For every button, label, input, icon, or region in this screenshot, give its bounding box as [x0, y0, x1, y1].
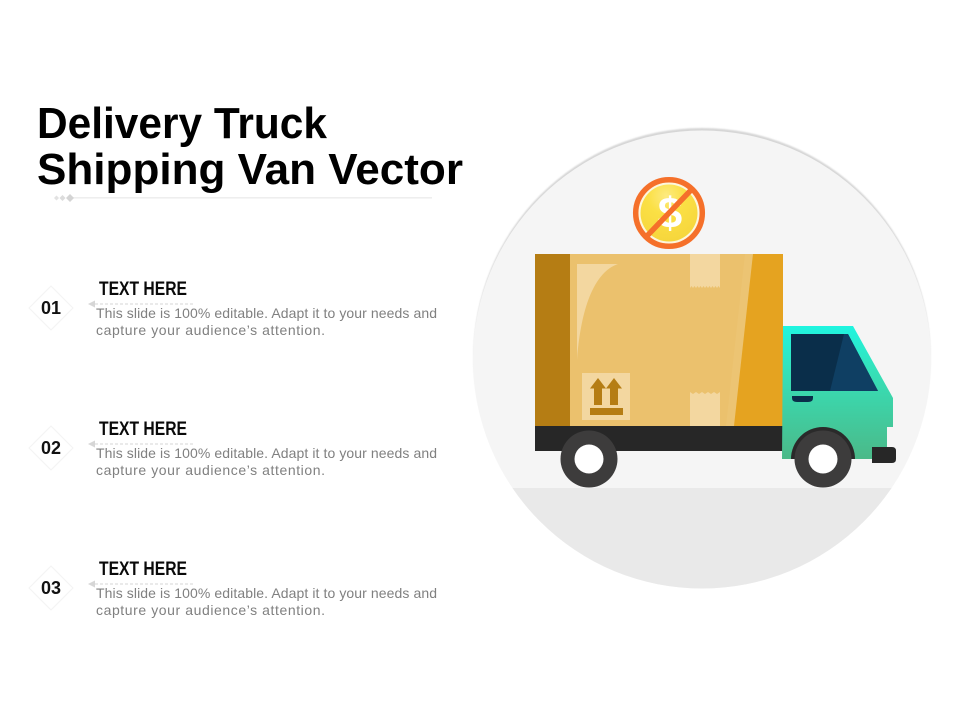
number badge 03	[29, 566, 73, 610]
arrow 02	[88, 440, 194, 448]
item text 03: This slide is 100% editable. Adapt it to your needs and	[96, 585, 437, 601]
number badge 03: 03	[41, 578, 61, 598]
item 03	[29, 559, 437, 618]
title: Delivery Truck	[37, 99, 327, 148]
box highlight	[577, 264, 618, 360]
item text 02: capture your audience’s attention.	[96, 462, 325, 478]
arrow 03	[88, 580, 194, 588]
number badge 01: 01	[41, 298, 61, 318]
icon: no money sign	[636, 180, 702, 246]
cargo box	[535, 254, 783, 426]
packing tape bottom	[690, 392, 720, 426]
front wheel	[791, 427, 855, 488]
item heading 03: TEXT HERE	[99, 559, 187, 580]
door handle	[792, 396, 813, 402]
item 02	[29, 419, 437, 478]
truck	[535, 254, 896, 488]
title: Shipping Van Vector	[37, 145, 463, 194]
bumper	[872, 447, 896, 463]
ground	[512, 488, 892, 588]
rear wheel	[560, 430, 618, 488]
packing tape top	[690, 254, 720, 288]
scene circle background	[473, 128, 931, 588]
number badge 01	[29, 286, 73, 330]
number badge 02	[29, 426, 73, 470]
this way up label	[582, 373, 630, 420]
item text 03: capture your audience’s attention.	[96, 602, 325, 618]
arrow 01	[88, 300, 194, 308]
number badge 02: 02	[41, 438, 61, 458]
item text 01: This slide is 100% editable. Adapt it to your needs and	[96, 305, 437, 321]
item text 02	[96, 445, 437, 478]
item text 01	[96, 305, 437, 338]
truck chassis	[535, 426, 783, 451]
cab	[782, 326, 893, 459]
item 01	[29, 279, 437, 338]
item heading 01: TEXT HERE	[99, 279, 187, 300]
item text 02: This slide is 100% editable. Adapt it to your needs and	[96, 445, 437, 461]
title	[37, 99, 463, 194]
icon: no money sign: $	[658, 189, 682, 238]
item text 03	[96, 585, 437, 618]
title divider	[54, 194, 432, 202]
cab window	[791, 334, 878, 391]
item text 01: capture your audience’s attention.	[96, 322, 325, 338]
item heading 02: TEXT HERE	[99, 419, 187, 440]
